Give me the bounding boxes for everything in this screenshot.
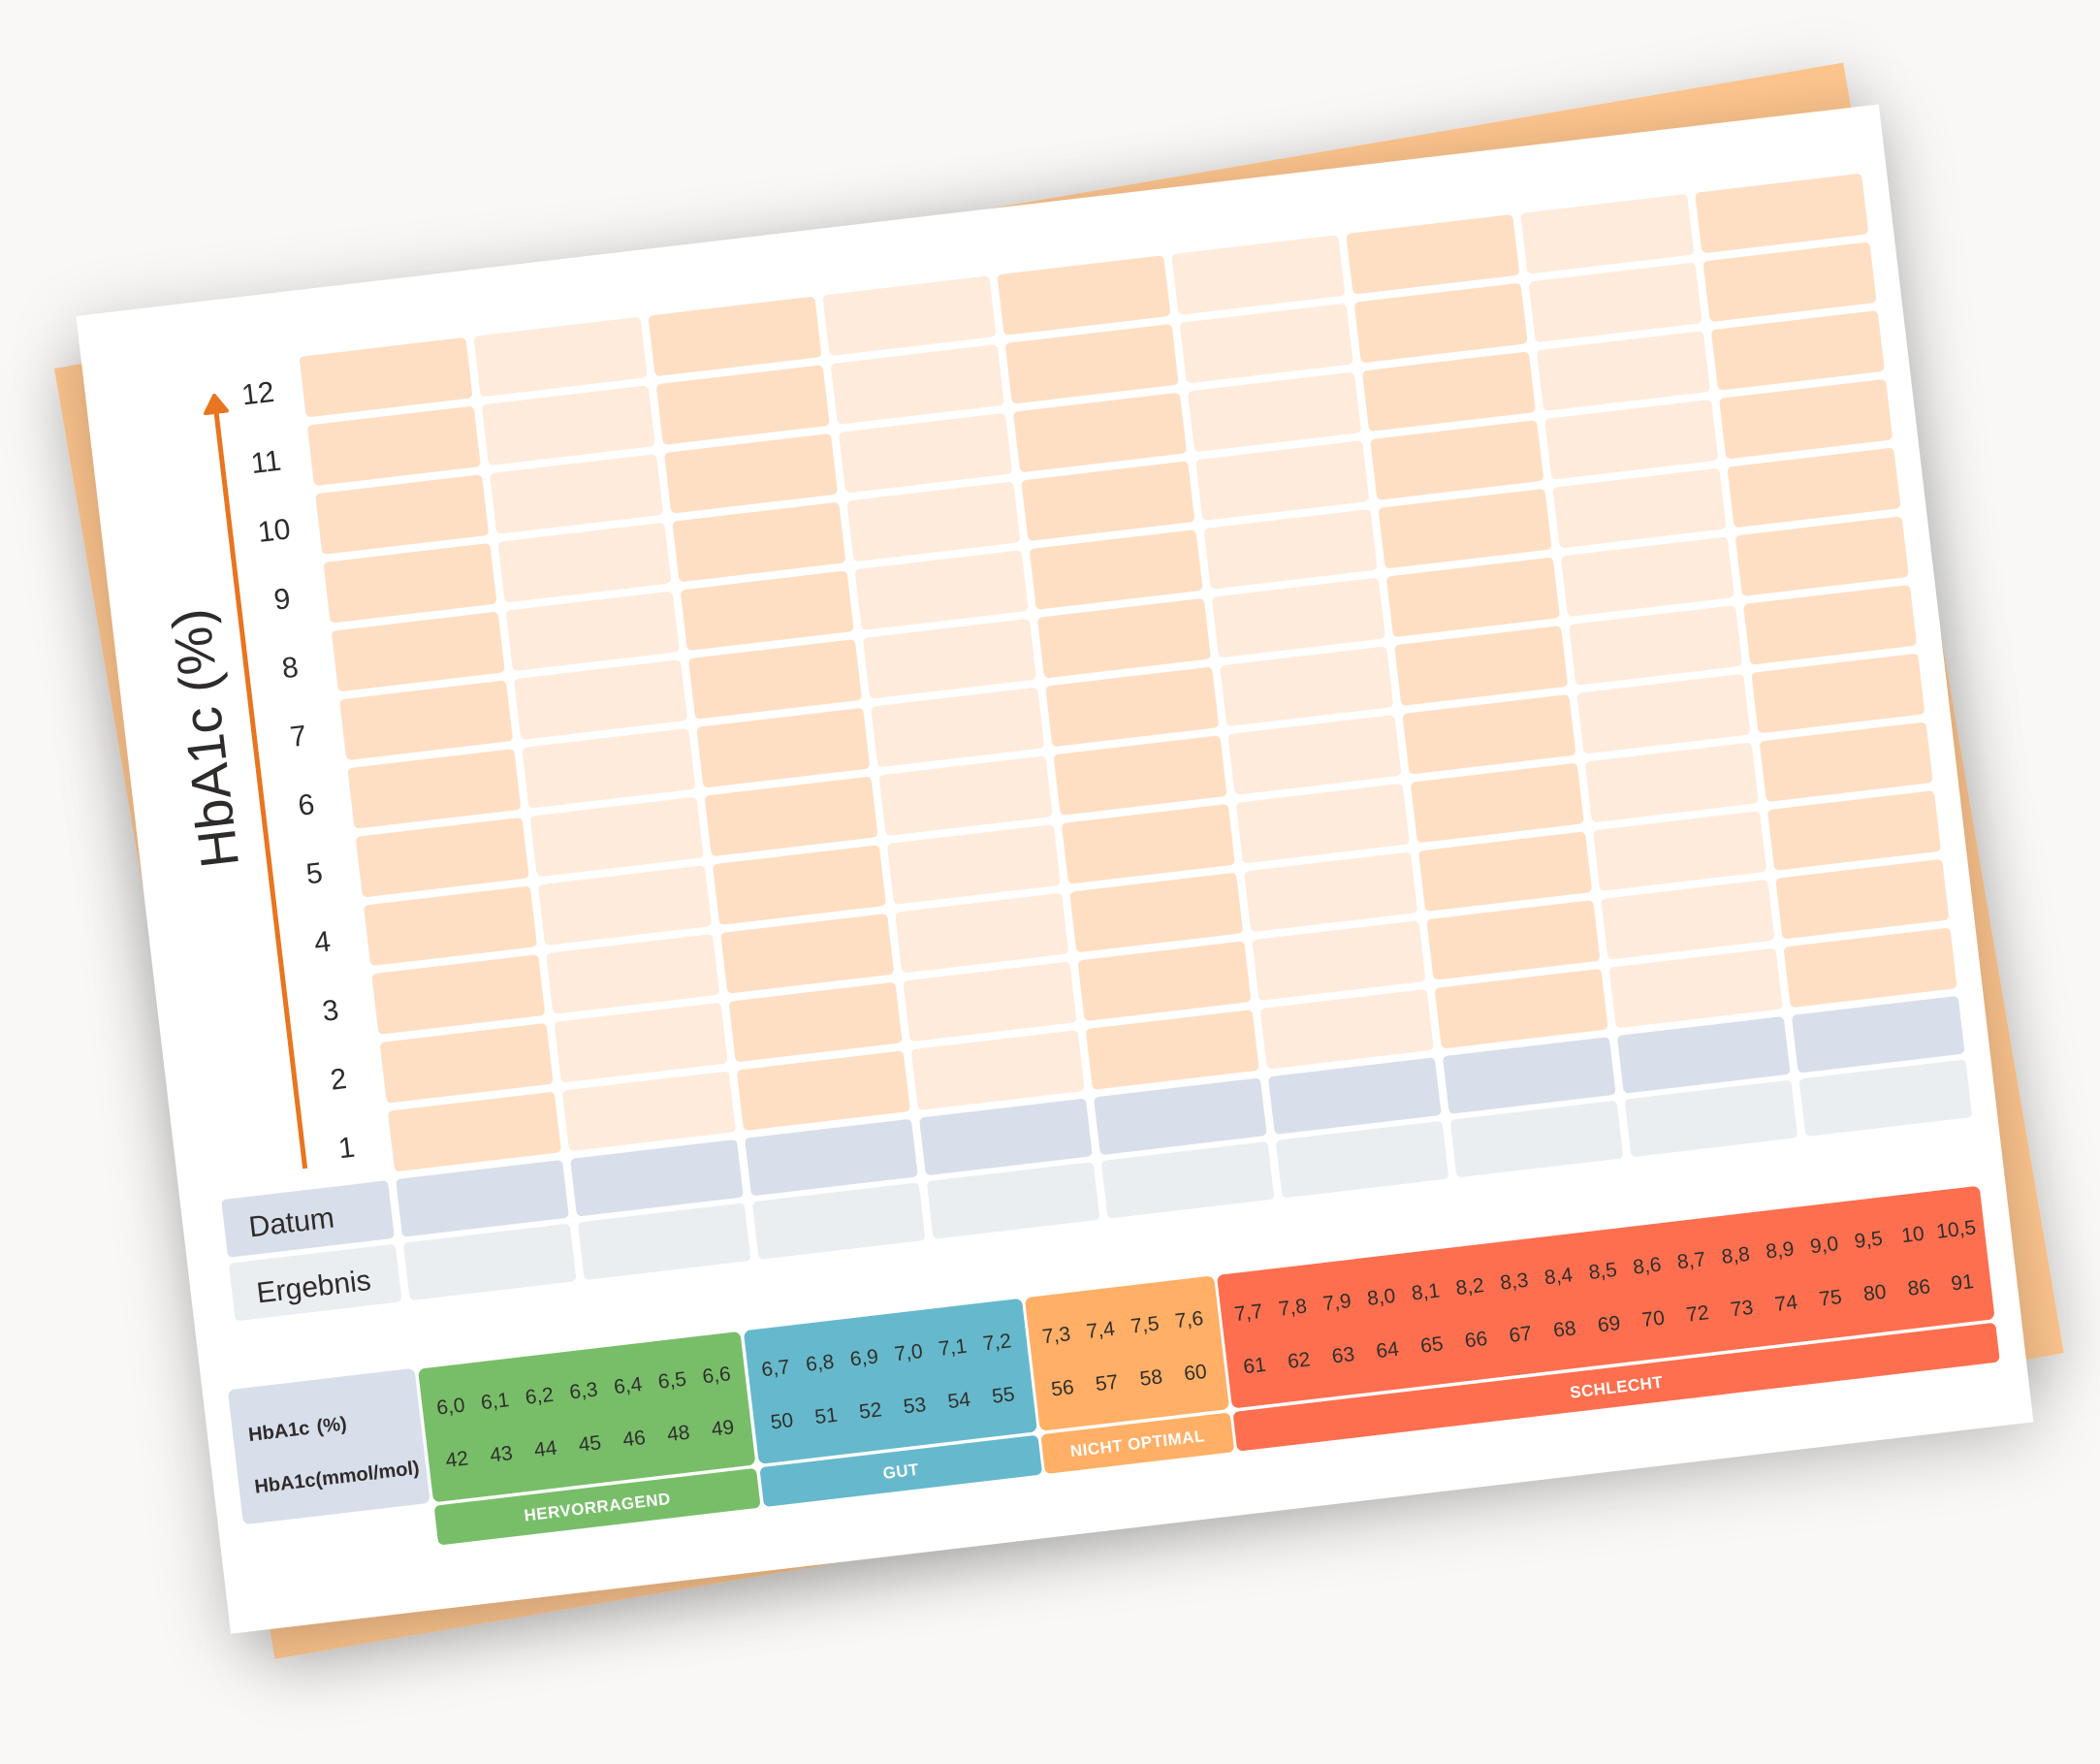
legend: gut: GUT <box>882 1460 920 1483</box>
row: Datum: Datum <box>247 1202 336 1243</box>
legend: gut: 54 <box>946 1389 971 1413</box>
grid row 5 <box>356 654 1925 898</box>
legend: gut: 7,2 <box>982 1330 1012 1356</box>
y axis title: HbA1c (%) <box>160 606 250 871</box>
legend: schlecht: 10,5 <box>1935 1216 1977 1243</box>
legend: gut: 7,1 <box>938 1335 969 1361</box>
legend: schlecht: 69 <box>1597 1312 1622 1336</box>
legend: schlecht: 7,9 <box>1321 1290 1352 1315</box>
y axis numbers: 8 <box>280 652 301 685</box>
legend: schlecht: 62 <box>1287 1348 1312 1373</box>
legend: schlecht: 10 <box>1900 1223 1925 1247</box>
legend: nicht optimal: 7,3 <box>1041 1323 1071 1348</box>
legend: schlecht: 80 <box>1862 1281 1888 1305</box>
grid row 6 <box>347 585 1917 829</box>
legend: schlecht: 9,5 <box>1853 1228 1884 1253</box>
legend: gut: 6,7 <box>760 1356 791 1381</box>
arrow: y axis <box>204 395 316 1170</box>
legend: hervorragend: 42 <box>444 1447 469 1472</box>
legend: hervorragend: 6,3 <box>568 1378 599 1404</box>
legend: hervorragend: 6,5 <box>657 1368 687 1394</box>
legend: nicht optimal: NICHT OPTIMAL <box>1069 1427 1206 1460</box>
legend: schlecht: 68 <box>1552 1317 1577 1342</box>
grid row 11 <box>307 241 1877 486</box>
legend: schlecht: 8,3 <box>1499 1269 1530 1295</box>
legend: gut <box>744 1299 1042 1507</box>
grid row 9 <box>323 379 1893 624</box>
y axis numbers: 5 <box>304 857 324 891</box>
y axis numbers: 12 <box>240 376 276 411</box>
legend: hervorragend: 6,1 <box>480 1389 510 1414</box>
row: Datum <box>221 996 1965 1258</box>
row: Ergebnis: Ergebnis <box>255 1265 372 1310</box>
grid row 7 <box>339 516 1909 760</box>
legend: hervorragend: 43 <box>489 1442 514 1467</box>
legend: nicht optimal: 7,5 <box>1130 1312 1161 1338</box>
legend: schlecht: 8,5 <box>1587 1259 1618 1284</box>
legend: nicht optimal: 58 <box>1138 1365 1163 1391</box>
legend: schlecht <box>1217 1186 2000 1452</box>
legend: hervorragend: 6,4 <box>613 1373 644 1398</box>
legend: schlecht: 70 <box>1640 1306 1666 1331</box>
legend: gut: 55 <box>991 1383 1016 1408</box>
y axis numbers: 1 <box>336 1132 357 1165</box>
legend: hervorragend: 6,2 <box>524 1384 555 1409</box>
legend: hervorragend: 6,6 <box>701 1363 732 1389</box>
legend: gut: 50 <box>770 1409 794 1434</box>
legend: nicht optimal: 60 <box>1183 1361 1208 1386</box>
grid row 1 <box>388 927 1957 1171</box>
legend: gut: 6,9 <box>849 1345 879 1371</box>
chart grid <box>299 174 1957 1171</box>
legend: row labels: HbA1c(mmol/mol) <box>253 1458 421 1498</box>
legend: hervorragend: 46 <box>621 1427 647 1452</box>
legend: nicht optimal: 7,4 <box>1085 1318 1116 1343</box>
legend: hervorragend: HERVORRAGEND <box>524 1490 672 1524</box>
legend: gut: 6,8 <box>805 1351 836 1376</box>
legend: hervorragend: 44 <box>533 1437 558 1461</box>
legend: schlecht: 8,6 <box>1632 1254 1663 1279</box>
y axis numbers <box>240 376 365 1166</box>
legend: schlecht: 64 <box>1375 1338 1400 1363</box>
legend: gut: 53 <box>903 1394 927 1419</box>
grid row 3 <box>371 790 1941 1035</box>
legend: nicht optimal: 7,6 <box>1174 1307 1204 1332</box>
legend: schlecht: 67 <box>1508 1323 1533 1347</box>
legend: hervorragend: 45 <box>577 1431 602 1457</box>
legend: gut: 52 <box>858 1398 883 1424</box>
y axis numbers: 2 <box>329 1063 348 1097</box>
legend: schlecht: 66 <box>1464 1328 1488 1353</box>
legend: schlecht: 75 <box>1818 1286 1843 1311</box>
legend: schlecht: 61 <box>1242 1354 1267 1378</box>
grid row 2 <box>380 859 1949 1104</box>
legend: gut: 51 <box>813 1404 839 1428</box>
grid row 4 <box>364 722 1933 966</box>
y axis numbers: 3 <box>321 994 340 1028</box>
legend: schlecht: 8,7 <box>1676 1248 1706 1273</box>
legend: schlecht: 7,7 <box>1233 1300 1264 1326</box>
legend: schlecht: SCHLECHT <box>1569 1373 1664 1402</box>
legend: schlecht: 8,9 <box>1765 1237 1796 1264</box>
legend: schlecht: 8,1 <box>1411 1279 1441 1305</box>
legend: row labels: HbA1c (%) <box>247 1413 348 1446</box>
legend: schlecht: 73 <box>1730 1297 1755 1321</box>
legend: schlecht: 63 <box>1331 1343 1355 1368</box>
legend: schlecht: 91 <box>1950 1270 1975 1296</box>
legend: schlecht: 9,0 <box>1809 1233 1839 1258</box>
legend: hervorragend <box>418 1331 761 1546</box>
y axis numbers: 7 <box>288 720 308 754</box>
legend: schlecht: 8,2 <box>1454 1274 1485 1299</box>
legend: hervorragend: 48 <box>666 1422 691 1446</box>
legend: schlecht: 8,0 <box>1366 1285 1397 1310</box>
legend: hervorragend: 6,0 <box>435 1394 466 1420</box>
y axis numbers: 4 <box>312 926 333 959</box>
legend: nicht optimal <box>1025 1275 1234 1474</box>
y axis numbers: 11 <box>249 445 283 480</box>
legend: schlecht: 72 <box>1685 1301 1710 1327</box>
y axis numbers: 6 <box>297 788 316 822</box>
grid row 10 <box>315 310 1885 555</box>
y axis numbers: 9 <box>272 583 292 617</box>
legend: hervorragend: 49 <box>711 1416 735 1441</box>
legend: schlecht: 8,4 <box>1543 1264 1575 1289</box>
legend: schlecht: 7,8 <box>1278 1295 1308 1321</box>
legend: schlecht: 8,8 <box>1720 1243 1751 1268</box>
legend: schlecht: 65 <box>1419 1332 1445 1358</box>
legend: nicht optimal: 56 <box>1050 1376 1075 1401</box>
row: Ergebnis <box>229 1059 1972 1321</box>
grid row 8 <box>332 448 1901 691</box>
legend: gut: 7,0 <box>893 1340 924 1365</box>
legend: row labels <box>228 1368 430 1524</box>
y axis numbers: 10 <box>256 513 292 549</box>
legend: schlecht: 74 <box>1773 1291 1799 1316</box>
legend: schlecht: 86 <box>1906 1275 1931 1300</box>
legend: nicht optimal: 57 <box>1095 1371 1120 1395</box>
grid row 12 <box>299 174 1868 418</box>
